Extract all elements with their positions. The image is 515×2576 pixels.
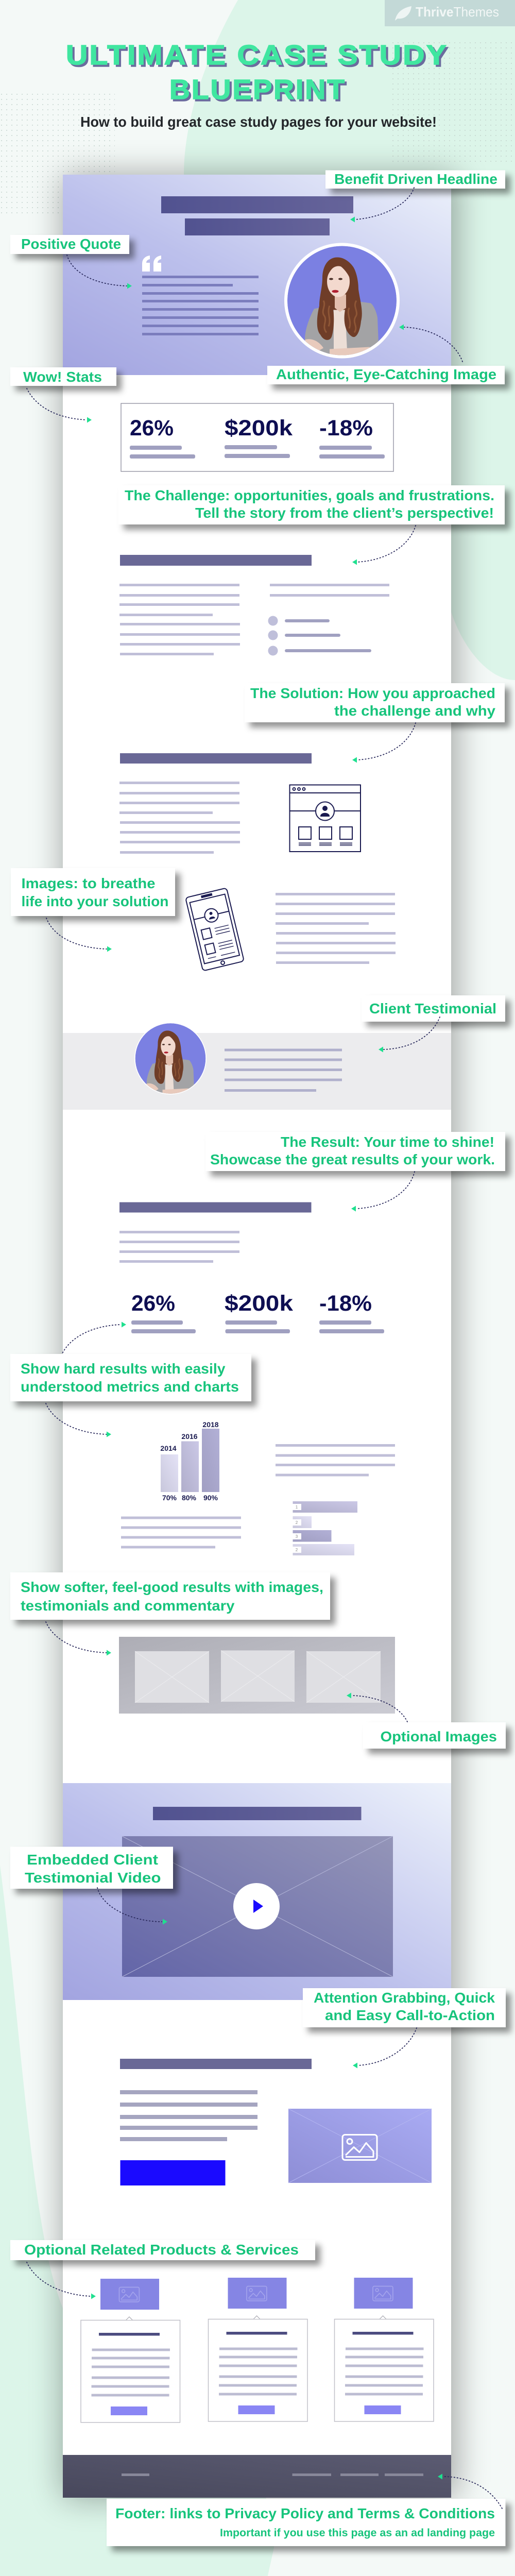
callout: Optional Images [363, 1722, 506, 1749]
horizontal bar chart: 3 [296, 1534, 298, 1539]
headline bars [161, 196, 353, 235]
callout: The Solution [245, 683, 505, 722]
title: ULTIMATE CASE STUDY [66, 40, 448, 71]
horizontal bar chart [293, 1501, 357, 1555]
callout: Authentic, Eye-Catching Image: Authentic, Eye-Catching Image [276, 366, 496, 382]
callout: Footer [107, 2499, 506, 2546]
panel: client testimonial [63, 1022, 451, 1110]
callout: Show hard results: understood metrics and charts [21, 1379, 239, 1395]
page shadow [63, 175, 456, 2498]
callout: Wow! Stats [10, 367, 116, 386]
arrow: optional images [347, 1693, 407, 1722]
arrow: stats [27, 388, 92, 422]
horizontal bar chart: 2 [296, 1548, 298, 1552]
icon: browser window [289, 785, 360, 852]
callout: Positive Quote [10, 235, 129, 254]
arrow: call to action [353, 2028, 417, 2068]
arrow: soft results [46, 1622, 111, 1656]
bar chart: 2018 [202, 1420, 219, 1429]
page [63, 175, 451, 2498]
panel: related product 2 [208, 2278, 307, 2421]
arrow: video [97, 1888, 167, 1925]
arrow: quote [67, 255, 132, 289]
callout: Footer: Important if you use this page as an ad landing page [220, 2527, 495, 2539]
bar chart [160, 1420, 219, 1502]
callout: Attention Grabbing: and Easy Call-to-Action [325, 2007, 495, 2023]
callout: The Result [205, 1132, 505, 1171]
panel: challenge content [119, 555, 389, 655]
horizontal bar chart: 2 [296, 1520, 298, 1525]
callout: Images: life into your solution [22, 893, 169, 909]
callout: Embedded Client Testimonial Video: Testimonial Video [25, 1870, 161, 1886]
CTA image [288, 2109, 432, 2183]
icon: quote mark [142, 256, 161, 272]
callout: The Challenge: The Challenge: opportunities, goals and frustrations. [125, 487, 494, 503]
callout: Wow! Stats: Wow! Stats [23, 369, 102, 385]
callout: Client Testimonial: Client Testimonial [369, 1001, 496, 1016]
stats box [121, 403, 393, 471]
testimonial text lines [225, 1049, 342, 1092]
result stats: -18% [319, 1291, 372, 1316]
callout: The Solution: the challenge and why [334, 703, 496, 719]
icon: phone [185, 888, 244, 971]
callout: Footer: Footer: links to Privacy Policy and Terms & Conditions [115, 2505, 495, 2521]
callout: Optional Related Products: Optional Related Products & Services [24, 2242, 299, 2258]
bar chart: 70% [162, 1494, 177, 1502]
callout: Images: Images: to breathe [22, 875, 156, 891]
callout: Show softer results: Show softer, feel-good results with images, [21, 1579, 323, 1595]
title: BLUEPRINT [169, 74, 346, 105]
subtitle: How to build great case study pages for your website! [80, 114, 437, 130]
callout: Attention Grabbing: Attention Grabbing, Quick [314, 1990, 495, 2006]
panel: related product 1 [81, 2279, 180, 2422]
callout: Show softer results [10, 1572, 330, 1620]
callout: Optional Images: Optional Images [380, 1728, 497, 1744]
video heading bar [153, 1807, 362, 1820]
title [66, 40, 448, 105]
callout: Benefit Driven Headline: Benefit Driven Headline [334, 171, 497, 187]
logo: Thrive Themes [385, 0, 515, 26]
stats box: $200k [225, 416, 293, 440]
arrow: headline [350, 188, 414, 223]
callout: Embedded Client Testimonial Video: Embedded Client [27, 1852, 158, 1868]
text lines beside chart [121, 1444, 395, 1549]
callout: The Result: Showcase the great results of your work. [210, 1151, 495, 1167]
panel: related product 3 [335, 2278, 434, 2421]
callout: The Challenge: Tell the story from the client’s perspective! [195, 505, 494, 521]
callout: The Challenge [118, 485, 505, 524]
callout: Attention Grabbing [303, 1988, 506, 2027]
stats box: -18% [319, 416, 373, 440]
arrow: footer [438, 2474, 502, 2509]
callout: Optional Related Products [10, 2240, 315, 2260]
callout: Client Testimonial [362, 995, 505, 1022]
portrait [284, 243, 400, 359]
callout: Embedded Client Testimonial Video [10, 1846, 173, 1889]
CTA button [121, 2160, 226, 2185]
callout: Positive Quote: Positive Quote [21, 236, 121, 252]
panel: call-to-action [120, 2059, 432, 2185]
bar chart: 90% [203, 1494, 218, 1502]
result stats: 26% [131, 1291, 175, 1316]
callout: Show hard results: Show hard results with easily [21, 1361, 226, 1377]
result stats: $200k [225, 1291, 293, 1316]
bar chart: 2016 [181, 1432, 198, 1440]
arrow: testimonial [379, 1017, 440, 1052]
logo: Thrive Themes: ThriveThemes [416, 4, 499, 20]
stats box: 26% [130, 416, 174, 440]
horizontal bar chart: 1 [296, 1505, 298, 1510]
panel: page footer [63, 2455, 451, 2498]
text lines beside phone [276, 893, 396, 964]
arrow: challenge [352, 526, 416, 565]
testimonial portrait [134, 1022, 207, 1095]
callout: Images [11, 868, 175, 916]
arrow: image [399, 325, 462, 362]
panel: video section [63, 1783, 451, 2000]
quote text lines [142, 276, 259, 335]
arrow: related products [27, 2262, 96, 2299]
callout: The Solution: The Solution: How you approached [250, 685, 495, 701]
callout: Show hard results [10, 1354, 251, 1401]
panel: hero [63, 175, 451, 375]
callout: The Result: The Result: Your time to shine! [281, 1134, 494, 1150]
panel: result content [119, 1202, 311, 1263]
result stats [131, 1291, 384, 1333]
video placeholder [122, 1836, 393, 1977]
callout: Show softer results: testimonials and commentary [21, 1598, 235, 1614]
bar chart: 2014 [160, 1444, 177, 1452]
arrow: result [351, 1172, 415, 1212]
panel: solution content [119, 753, 312, 854]
arrow: solution [352, 723, 416, 762]
bar chart: 80% [182, 1494, 197, 1502]
arrow: hard results to stats [61, 1322, 126, 1355]
image gallery [119, 1637, 395, 1714]
arrow: images [46, 918, 112, 952]
arrow: charts [46, 1403, 111, 1437]
